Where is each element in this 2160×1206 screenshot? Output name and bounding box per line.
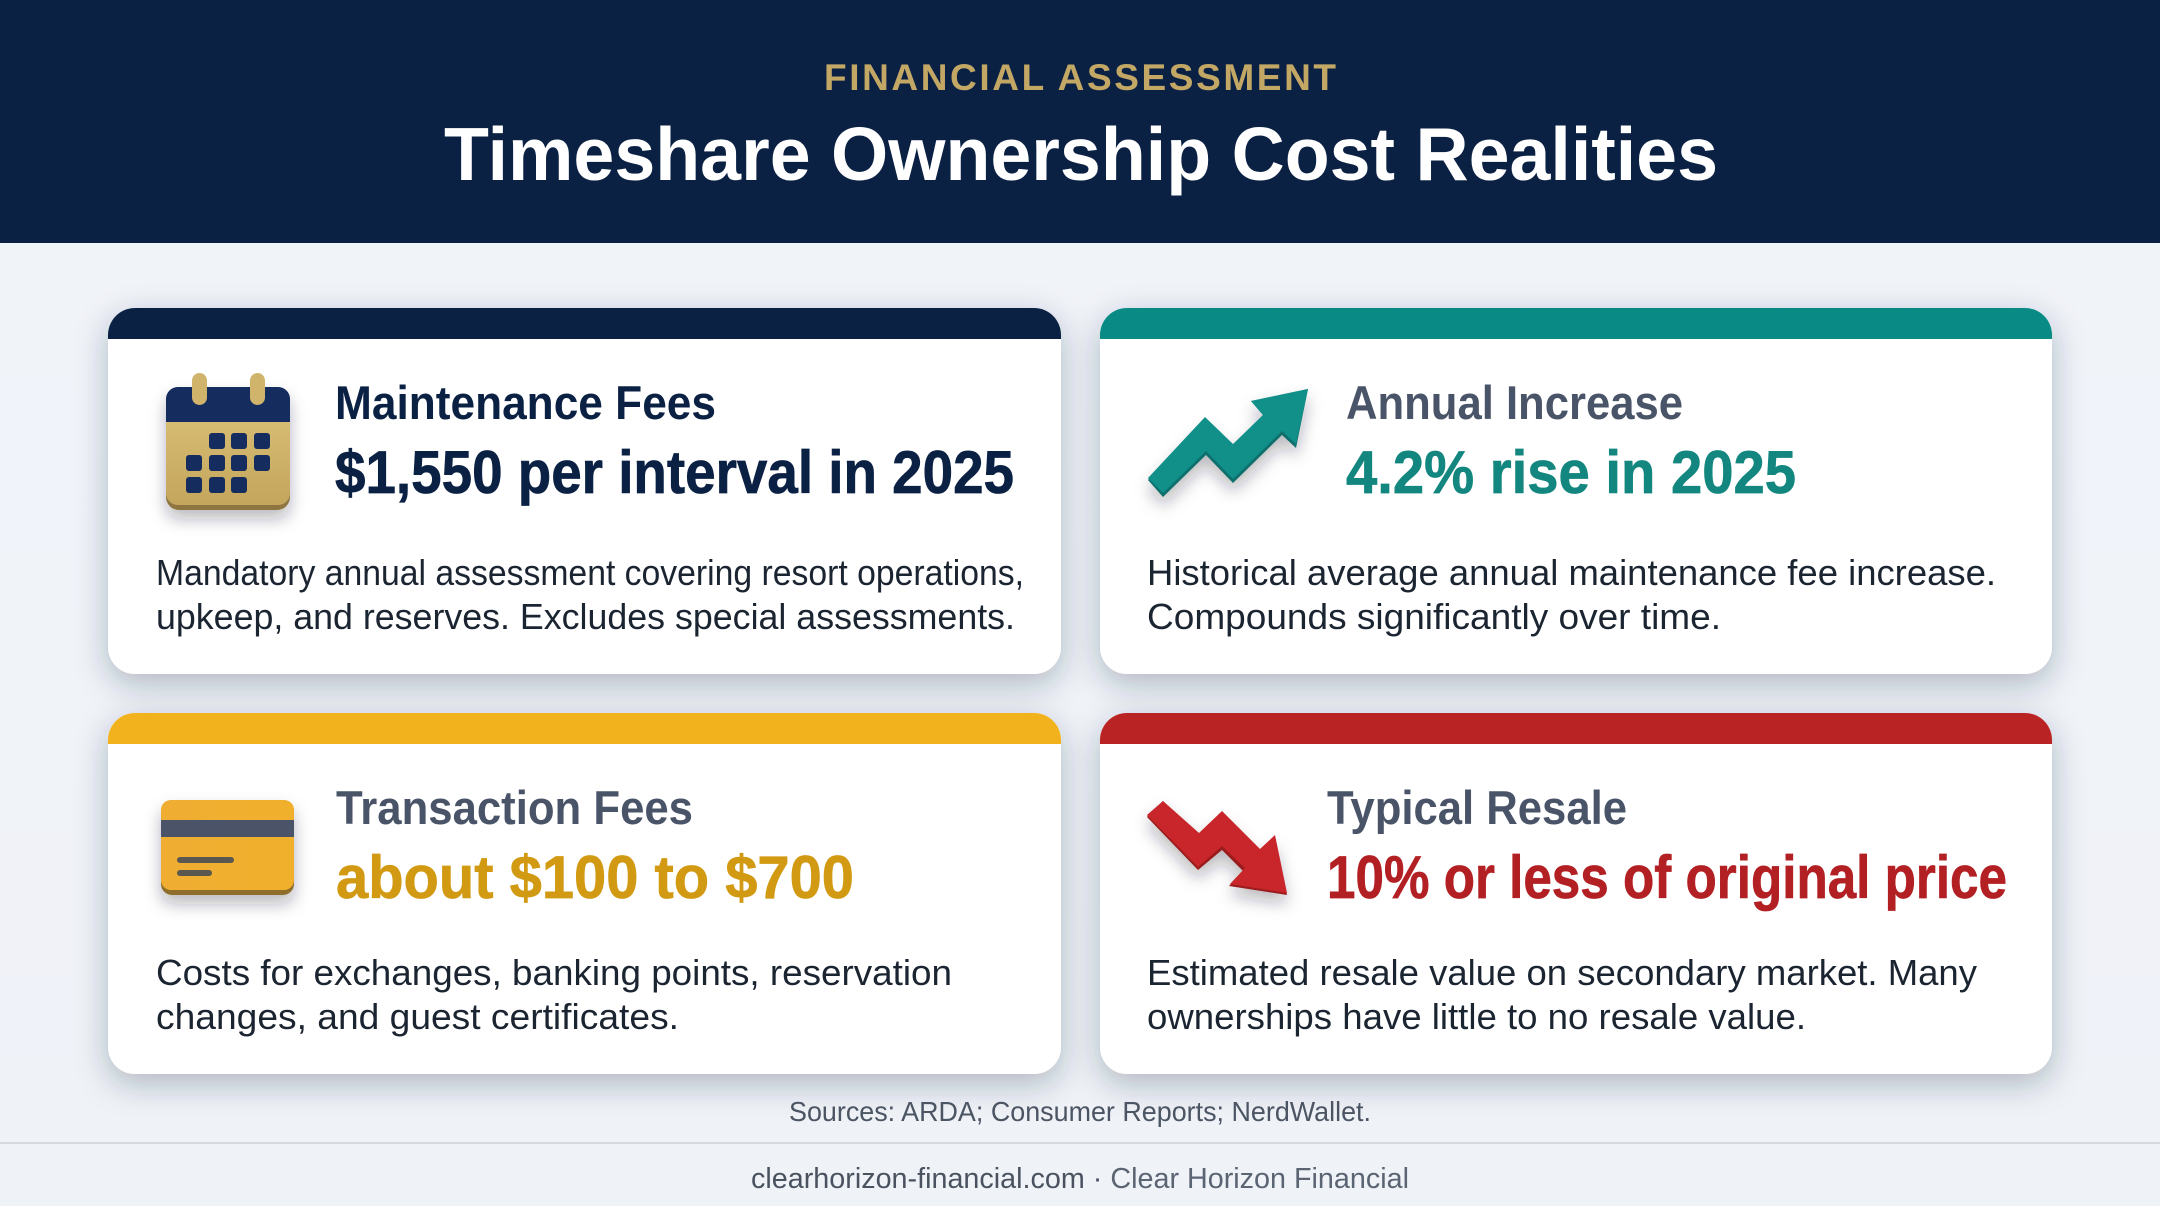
description: typical resale: ownerships have little to no resale value. — [1147, 996, 1806, 1037]
icon: rising arrow — [1148, 389, 1308, 497]
description: annual increase: Historical average annual maintenance fee increase. — [1147, 552, 1996, 593]
description: annual increase — [1147, 552, 1996, 637]
value: transaction fees: about $100 to $700 — [336, 844, 854, 911]
icon: calendar — [166, 373, 290, 510]
description: maintenance fees — [156, 552, 1024, 637]
heading: annual increase: Annual Increase — [1346, 376, 1683, 429]
eyebrow: FINANCIAL ASSESSMENT — [824, 57, 1336, 98]
description: typical resale: Estimated resale value on secondary market. Many — [1147, 952, 1977, 993]
icon: falling arrow — [1147, 801, 1287, 895]
header banner — [0, 0, 2160, 243]
description: typical resale — [1147, 952, 1977, 1037]
panel: maintenance fees — [108, 308, 1061, 674]
description: transaction fees — [156, 952, 952, 1037]
value: typical resale: 10% or less of original price — [1327, 844, 2007, 911]
footer attribution: clearhorizon-financial.com · Clear Horizon Financial — [751, 1163, 1409, 1195]
value: annual increase: 4.2% rise in 2025 — [1346, 439, 1796, 506]
description: transaction fees: Costs for exchanges, banking points, reservation — [156, 952, 952, 993]
heading: typical resale: Typical Resale — [1327, 781, 1627, 834]
panel: typical resale — [1100, 713, 2052, 1074]
description: maintenance fees: Mandatory annual assessment covering resort operations, — [156, 552, 1024, 593]
icon: credit card — [161, 800, 294, 895]
panel: transaction fees — [108, 713, 1061, 1074]
sources note: Sources: ARDA; Consumer Reports; NerdWallet. — [789, 1096, 1371, 1127]
description: transaction fees: changes, and guest certificates. — [156, 996, 679, 1037]
heading: maintenance fees: Maintenance Fees — [335, 376, 716, 429]
title: Timeshare Ownership Cost Realities — [444, 112, 1718, 196]
panel: annual increase — [1100, 308, 2052, 674]
value: maintenance fees: $1,550 per interval in 2025 — [335, 439, 1014, 506]
description: maintenance fees: upkeep, and reserves. Excludes special assessments. — [156, 596, 1015, 637]
heading: transaction fees: Transaction Fees — [336, 781, 693, 834]
description: annual increase: Compounds significantly over time. — [1147, 596, 1721, 637]
